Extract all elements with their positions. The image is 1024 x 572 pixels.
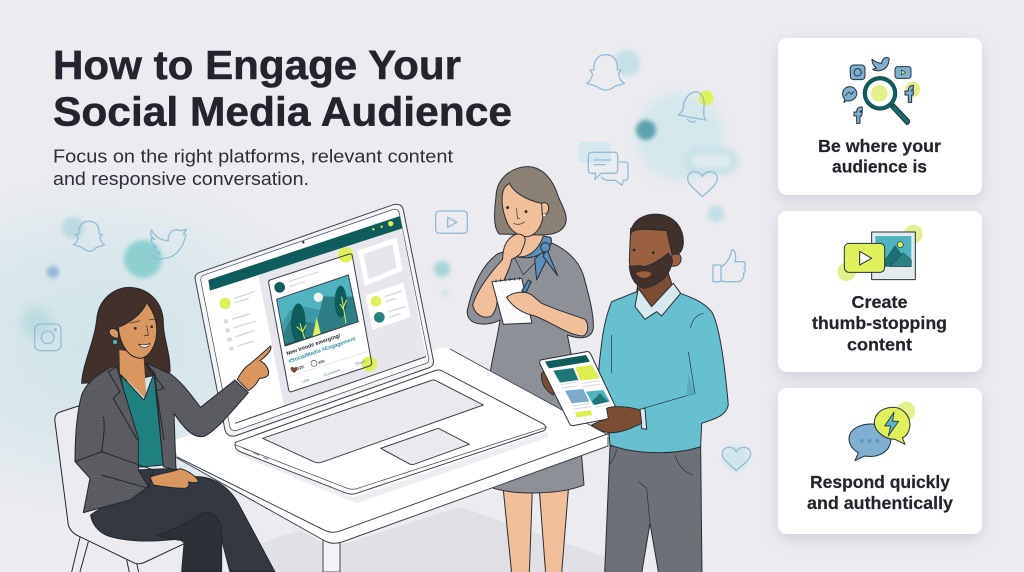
- icon: chat bubbles: [588, 152, 628, 185]
- chair legs: [72, 537, 139, 572]
- post stats: Like: [301, 377, 311, 384]
- legs: [503, 490, 568, 572]
- icon: bell: [678, 92, 706, 122]
- sweater: [599, 292, 728, 453]
- eyes: [633, 249, 655, 254]
- grey dress: [467, 243, 593, 493]
- subtitle: [53, 146, 453, 189]
- subtitle: and responsive conversation.: [53, 168, 309, 189]
- post stats: [291, 358, 367, 384]
- crossed leg: [157, 512, 222, 572]
- pointing hand: [237, 346, 271, 391]
- teal top: [121, 373, 163, 467]
- social post card: [268, 247, 377, 392]
- subtitle: Focus on the right platforms, relevant content: [53, 146, 453, 166]
- sleeve shadow: [687, 373, 695, 396]
- icon: twitter bird: [149, 229, 187, 259]
- floating social icons: [35, 55, 751, 471]
- eyes and smile: [130, 319, 156, 347]
- tablet: [540, 352, 619, 426]
- laptop bezel: [201, 209, 429, 431]
- card: be where your audience is: [778, 38, 982, 195]
- icon: thumbs up: [713, 250, 745, 282]
- scarf: [517, 236, 558, 280]
- card text: Be where your: [818, 136, 941, 156]
- laptop base: [235, 370, 546, 494]
- icon: heart top right: [688, 172, 717, 197]
- icon: video play: [436, 211, 467, 233]
- sidebar: [210, 275, 284, 423]
- card text: and authentically: [807, 493, 953, 513]
- hair: [631, 214, 683, 254]
- face: [118, 303, 157, 358]
- neckline: [515, 258, 536, 275]
- soft glow dots: [21, 50, 749, 471]
- neck and chest: [119, 350, 147, 400]
- hand on lap: [150, 469, 199, 488]
- laptop lid outer: [195, 204, 433, 436]
- icon: video and photo: [837, 225, 923, 281]
- table side: [177, 435, 608, 543]
- card: create thumb-stopping content: [778, 211, 982, 372]
- card text: audience is: [832, 156, 927, 176]
- neck: [517, 217, 545, 258]
- notepad: [492, 277, 532, 324]
- tablet tiles: [553, 365, 610, 417]
- right hand and cuff: [640, 408, 647, 429]
- card text: thumb-stopping: [812, 313, 947, 333]
- ear: [542, 203, 549, 216]
- pen: [522, 280, 531, 293]
- icon: snapchat ghost top: [587, 55, 625, 90]
- head: [629, 228, 672, 288]
- card text: Respond quickly: [810, 472, 950, 492]
- icon: magnifier with social logos: [843, 58, 920, 125]
- title: How to Engage Your: [53, 42, 461, 88]
- vents: [243, 448, 268, 459]
- neck: [637, 273, 673, 310]
- forearm and writing hand: [507, 292, 588, 336]
- hair: [82, 287, 170, 383]
- figure: seated woman pointing: [55, 287, 275, 572]
- ear: [671, 253, 681, 266]
- top bar: [208, 216, 402, 291]
- card text: [807, 472, 953, 513]
- laptop base shadow: [233, 431, 548, 503]
- table top: [175, 348, 610, 532]
- keyboard: [263, 380, 483, 463]
- post stats: Comment: [323, 367, 342, 378]
- sleeve and lapels: [75, 363, 164, 488]
- table: [175, 348, 610, 572]
- trackpad: [381, 428, 469, 464]
- card: respond quickly and authentically: [778, 388, 982, 534]
- trousers: [91, 468, 275, 572]
- laptop: [195, 204, 548, 503]
- camera and bar dots: [302, 221, 393, 243]
- post text: #SocialMedia #Engagement: [288, 336, 357, 365]
- card text: content: [847, 334, 912, 354]
- shirt collar: [635, 283, 681, 319]
- icon: instagram: [35, 324, 61, 351]
- post stats: 350: [317, 358, 326, 365]
- figure: older woman with notepad: [467, 167, 593, 572]
- sidebar items: [219, 292, 255, 351]
- screen: [208, 216, 426, 423]
- hand left on tablet: [541, 372, 557, 395]
- title: Social Media Audience: [53, 88, 512, 134]
- trousers: [605, 446, 702, 572]
- right widgets: [358, 237, 411, 330]
- icon: snapchat ghost left: [73, 221, 105, 251]
- beard: [629, 253, 673, 288]
- table leg: [323, 540, 340, 572]
- post text: New trends emerging/: [286, 333, 342, 357]
- post stats: 12K: [296, 364, 305, 371]
- title: [53, 42, 512, 134]
- post image: [277, 276, 358, 346]
- post stats: Share: [354, 358, 367, 367]
- arm and hand at chin: [473, 234, 525, 317]
- icon: heart lower right: [722, 447, 751, 471]
- hair: [495, 167, 566, 235]
- chair back and seat: [55, 406, 185, 564]
- blazer torso: [75, 367, 148, 513]
- card text: [812, 292, 947, 354]
- face: [502, 183, 543, 237]
- icon: speech bubbles: [849, 402, 915, 461]
- ear: [109, 329, 119, 338]
- eyes and smile: [506, 206, 546, 217]
- card text: Create: [852, 292, 908, 312]
- card text: [818, 136, 941, 176]
- figure: man with tablet: [540, 214, 728, 572]
